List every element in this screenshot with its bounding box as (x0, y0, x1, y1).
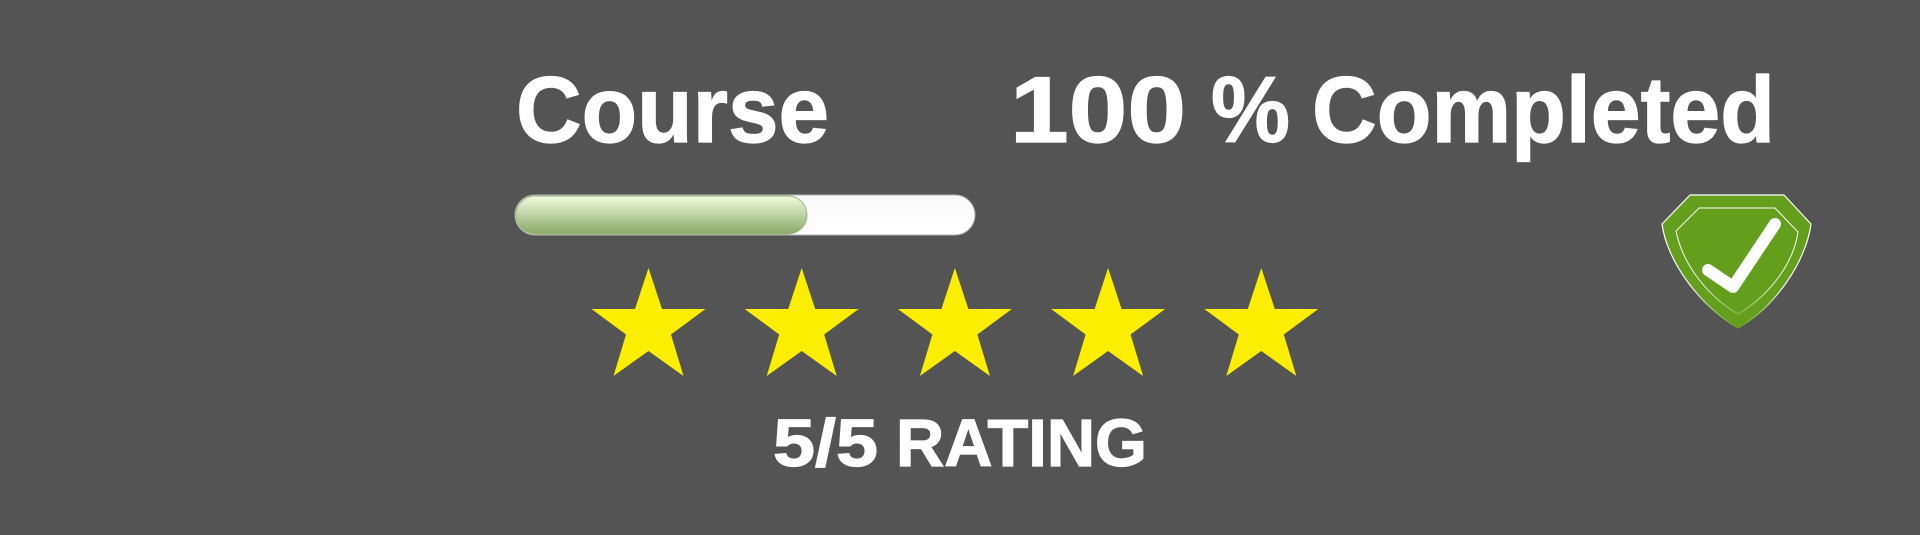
progress bar (515, 195, 975, 235)
star 1 (592, 268, 706, 376)
word rating: RATING (896, 406, 1147, 481)
heading: 100 % completed (1010, 57, 1775, 162)
star 3 (898, 268, 1012, 376)
star 4 (1051, 268, 1165, 376)
rating label (773, 406, 1147, 481)
shield body (1662, 195, 1811, 328)
heading: course: Course (516, 57, 829, 162)
number 100: 100 (1010, 57, 1186, 162)
star rating (592, 268, 1318, 376)
score 5/5: 5/5 (773, 406, 878, 481)
shield inner outline (1676, 208, 1798, 314)
star 2 (745, 268, 859, 376)
percent sign: % (1211, 57, 1290, 162)
progress track (515, 195, 975, 235)
check mark (1708, 224, 1775, 287)
icon: shield with check mark (1662, 195, 1811, 328)
progress fill (516, 196, 807, 234)
word completed: Completed (1312, 57, 1775, 162)
star 5 (1204, 268, 1318, 376)
